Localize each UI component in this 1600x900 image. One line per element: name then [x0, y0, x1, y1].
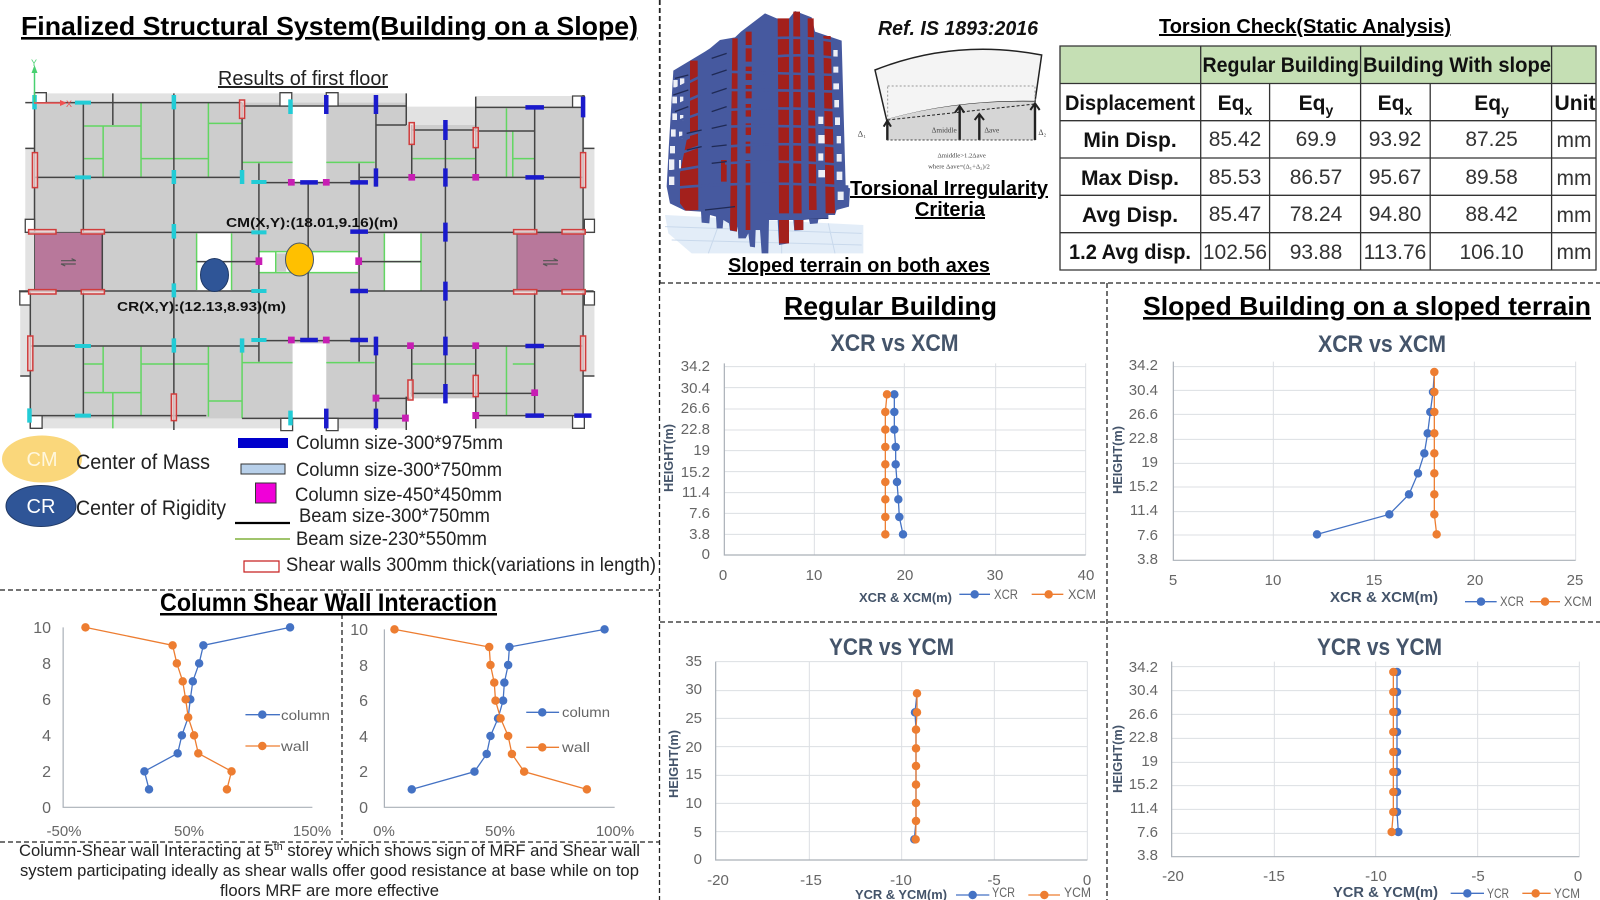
diagram: torsional irregularity: where Δave=(Δ₁+Δ₂)/2 — [928, 164, 990, 171]
legend: center markers: CR — [27, 496, 55, 518]
legend: center markers: Center of Rigidity — [76, 497, 226, 520]
icon: center of rigidity marker — [200, 258, 228, 292]
chart: regular YCR vs YCM: -15 — [800, 872, 822, 889]
table: torsion check: 102.56 — [1203, 241, 1267, 264]
chart: sloped XCR vs XCM: XCR — [1500, 593, 1524, 609]
caption: interaction findings: floors MRF are more effective — [220, 881, 439, 900]
chart: sloped XCR vs XCM: 15 — [1366, 572, 1382, 589]
chart: sloped XCR vs XCM — [1110, 331, 1592, 609]
chart: sloped YCR vs YCM: -20 — [1162, 868, 1184, 885]
chart: sloped XCR vs XCM: 34.2 — [1129, 357, 1158, 374]
chart: sloped YCR vs YCM: 19 — [1141, 753, 1158, 770]
table: torsion check: 93.92 — [1369, 128, 1421, 151]
chart: sloped YCR vs YCM: 26.6 — [1129, 706, 1158, 723]
label: CM coordinates: CM(X,Y):(18.01,9.16)(m) — [226, 215, 398, 230]
chart: regular YCR vs YCM: 0 — [1083, 872, 1091, 889]
chart: regular YCR vs YCM: 15 — [685, 766, 702, 783]
table: torsion check: x — [1245, 102, 1253, 118]
chart: sloped YCR vs YCM: 30.4 — [1129, 682, 1158, 699]
3D building model — [665, 11, 863, 253]
diagram: torsional irregularity: Δ₂ — [1038, 128, 1046, 137]
chart: regular YCR vs YCM: 10 — [685, 795, 702, 812]
chart: sloped XCR vs XCM: 15.2 — [1129, 478, 1158, 495]
table: torsion check: 69.9 — [1296, 128, 1336, 151]
chart: sloped YCR vs YCM: 0 — [1574, 868, 1582, 885]
chart: sloped XCR vs XCM: 20 — [1467, 572, 1483, 589]
heading: regular building: Regular Building — [784, 291, 997, 321]
chart: regular YCR vs YCM: 5 — [694, 824, 702, 841]
legend: center markers: CM — [26, 449, 58, 471]
chart: sloped YCR vs YCM: 7.6 — [1137, 824, 1158, 841]
diagram: torsional irregularity: Δmiddle — [932, 126, 957, 135]
chart: regular XCR vs XCM: 30 — [987, 567, 1003, 584]
chart: sloped YCR vs YCM: HEIGHT(m) — [1110, 725, 1125, 793]
chart: interaction, right: wall — [561, 739, 590, 755]
chart: interaction, left: 6 — [42, 692, 51, 709]
legend: member sizes: Shear walls 300mm thick(variations in length) — [286, 555, 656, 576]
legend: member sizes: Beam size-230*550mm — [296, 529, 487, 550]
chart: regular YCR vs YCM: -20 — [707, 872, 729, 889]
chart: regular XCR vs XCM: 26.6 — [681, 400, 710, 417]
table: torsion check: Min Disp. — [1083, 129, 1177, 152]
label: CR coordinates: CR(X,Y):(12.13,8.93)(m) — [117, 299, 286, 314]
chart: regular XCR vs XCM: 34.2 — [681, 358, 710, 375]
label: torsional irregularity criteria: Torsional Irregularity — [850, 178, 1049, 200]
caption: interaction findings: storey which shows sign of MRF and Shear wall — [283, 841, 640, 860]
chart: sloped YCR vs YCM: 34.2 — [1129, 659, 1158, 676]
chart: interaction, left: wall — [280, 738, 309, 754]
chart: interaction, left: column — [281, 707, 330, 723]
chart: sloped YCR vs YCM: -5 — [1471, 868, 1485, 885]
chart: interaction, right: 0% — [373, 823, 395, 840]
table: torsion check: 85.47 — [1209, 203, 1261, 226]
chart: regular YCR vs YCM: 0 — [694, 851, 702, 868]
chart: regular XCR vs XCM: 40 — [1078, 567, 1094, 584]
chart: sloped XCR vs XCM: 25 — [1567, 572, 1583, 589]
legend: center markers: Center of Mass — [76, 451, 210, 474]
chart: interaction, right: 100% — [596, 823, 634, 840]
chart: sloped YCR vs YCM — [1110, 634, 1582, 900]
chart: sloped YCR vs YCM: -15 — [1263, 868, 1285, 885]
chart: sloped YCR vs YCM: 11.4 — [1130, 800, 1158, 817]
table: torsion check: mm — [1556, 204, 1592, 227]
chart: interaction, right: 8 — [359, 658, 368, 675]
chart: interaction, left: 50% — [174, 823, 204, 840]
chart: regular YCR vs YCM — [666, 634, 1091, 900]
chart: regular YCR vs YCM: 35 — [685, 653, 702, 670]
chart: sloped XCR vs XCM: XCM — [1564, 593, 1592, 609]
caption: interaction findings — [19, 841, 640, 900]
caption: interaction findings: Column-Shear wall Interacting at 5 — [19, 841, 280, 860]
chart: regular XCR vs XCM: 15.2 — [681, 464, 710, 481]
chart: interaction, left: 150% — [293, 823, 331, 840]
label: torsional irregularity criteria — [850, 178, 1049, 221]
legend: member sizes — [235, 433, 656, 576]
legend: member sizes: Column size-300*975mm — [296, 433, 503, 454]
diagram: torsional irregularity — [858, 49, 1046, 171]
chart: regular YCR vs YCM: YCR — [992, 884, 1015, 900]
caption: interaction findings: th — [274, 841, 283, 853]
table: torsion check: 85.53 — [1209, 166, 1261, 189]
table: torsion check: mm — [1556, 129, 1592, 152]
table: torsion check: 95.67 — [1369, 166, 1421, 189]
chart: interaction, right: 50% — [485, 823, 515, 840]
heading: results of first floor: Results of first floor — [218, 68, 388, 90]
chart: interaction, left: -50% — [46, 823, 82, 840]
chart: interaction, left: 10 — [33, 620, 51, 637]
chart: regular XCR vs XCM: 3.8 — [689, 526, 710, 543]
table: torsion check: Building With slope — [1363, 54, 1551, 77]
chart: regular XCR vs XCM: 11.4 — [682, 484, 710, 501]
table: torsion check: 113.76 — [1364, 241, 1426, 264]
chart: interaction, left: 8 — [42, 656, 51, 673]
table: torsion check: 86.57 — [1290, 166, 1342, 189]
chart: interaction, right — [350, 622, 634, 840]
table: torsion check: 94.80 — [1369, 203, 1421, 226]
chart: regular XCR vs XCM: XCR — [994, 586, 1018, 602]
chart: interaction, left: 4 — [42, 728, 51, 745]
chart: interaction, right: 0 — [359, 800, 368, 817]
chart: regular YCR vs YCM: 20 — [685, 739, 702, 756]
diagram: torsional irregularity: Δmiddle>1.2Δave — [937, 152, 986, 159]
table: torsion check: 78.24 — [1290, 203, 1343, 226]
chart: regular XCR vs XCM: 19 — [693, 442, 710, 459]
chart: interaction, left — [33, 620, 331, 840]
table: torsion check: 1.2 Avg disp. — [1069, 241, 1191, 264]
table: torsion check: Max Disp. — [1081, 167, 1179, 190]
heading: sloped building: Sloped Building on a sloped terrain — [1143, 291, 1591, 321]
table: torsion check: Displacement — [1065, 92, 1195, 115]
icon: coordinate axes: X — [66, 99, 72, 109]
chart: regular YCR vs YCM: 25 — [685, 710, 702, 727]
legend: center markers — [2, 436, 226, 526]
chart: interaction, right: 2 — [359, 764, 368, 781]
chart: regular XCR vs XCM: XCR vs XCM — [830, 330, 958, 357]
chart: interaction, right: 4 — [359, 729, 368, 746]
chart: sloped XCR vs XCM: 30.4 — [1129, 382, 1158, 399]
table: torsion check: y — [1326, 102, 1334, 118]
label: code reference: Ref. IS 1893:2016 — [878, 18, 1039, 40]
chart: regular XCR vs XCM: HEIGHT(m) — [661, 424, 676, 492]
table: torsion check: y — [1501, 102, 1509, 118]
chart: interaction, right: column — [562, 704, 610, 720]
chart: regular XCR vs XCM: XCR & XCM(m) — [859, 590, 952, 605]
chart: regular YCR vs YCM: HEIGHT(m) — [666, 730, 681, 798]
icon: center of mass marker — [286, 243, 314, 276]
table: torsion check: Eq — [1299, 92, 1326, 115]
chart: sloped XCR vs XCM: 26.6 — [1129, 406, 1158, 423]
table: torsion check: Eq — [1474, 92, 1501, 115]
label: sloped terrain: Sloped terrain on both axes — [728, 255, 990, 277]
chart: sloped YCR vs YCM: 3.8 — [1137, 847, 1158, 864]
chart: regular XCR vs XCM — [661, 330, 1096, 605]
chart: regular YCR vs YCM: -5 — [987, 872, 1001, 889]
chart: regular YCR vs YCM: YCM — [1064, 884, 1091, 900]
chart: sloped XCR vs XCM: 11.4 — [1130, 502, 1158, 519]
table: torsion check: mm — [1556, 241, 1592, 264]
chart: sloped YCR vs YCM: 22.8 — [1129, 729, 1158, 746]
chart: sloped YCR vs YCM: YCR vs YCM — [1317, 634, 1442, 661]
title: Finalized Structural System(Building on a Slope) — [21, 11, 638, 41]
chart: interaction, right: 10 — [350, 622, 368, 639]
legend: member sizes: Column size-450*450mm — [295, 485, 502, 506]
chart: sloped XCR vs XCM: 5 — [1169, 572, 1177, 589]
legend: member sizes: Column size-300*750mm — [296, 460, 502, 481]
table: torsion check: 89.58 — [1465, 166, 1518, 189]
chart: regular XCR vs XCM: 30.4 — [681, 380, 710, 397]
icon: coordinate axes — [31, 58, 72, 109]
table: torsion check: mm — [1556, 167, 1592, 190]
heading: column shear wall interaction: Column Shear Wall Interaction — [160, 589, 497, 617]
chart: regular XCR vs XCM: 0 — [702, 546, 710, 563]
chart: sloped XCR vs XCM: XCR & XCM(m) — [1330, 589, 1438, 606]
chart: regular XCR vs XCM: 20 — [897, 567, 913, 584]
chart: sloped YCR vs YCM: -10 — [1365, 868, 1387, 885]
chart: sloped XCR vs XCM: XCR vs XCM — [1318, 331, 1446, 358]
table: torsion check: 93.88 — [1290, 241, 1342, 264]
chart: interaction, right: 6 — [359, 693, 368, 710]
chart: regular YCR vs YCM: YCR vs YCM — [829, 634, 954, 661]
chart: sloped YCR vs YCM: 15.2 — [1129, 776, 1158, 793]
chart: regular XCR vs XCM: 10 — [806, 567, 822, 584]
table: torsion check: 88.42 — [1465, 203, 1518, 226]
caption: interaction findings: system participating ideally as shear walls offer good resistance at base while on top — [20, 861, 639, 880]
chart: interaction, left: 0 — [42, 800, 51, 817]
floor plan — [19, 93, 594, 431]
table: torsion check: Eq — [1218, 92, 1245, 115]
diagram: torsional irregularity: Δave — [984, 126, 999, 135]
heading: torsion check: Torsion Check(Static Analysis) — [1159, 16, 1451, 38]
table: torsion check: 85.42 — [1209, 128, 1261, 151]
table: torsion check: Unit — [1554, 92, 1596, 115]
chart: sloped XCR vs XCM: 3.8 — [1137, 551, 1158, 568]
chart: regular XCR vs XCM: 22.8 — [681, 421, 710, 438]
chart: interaction, left: 2 — [42, 764, 51, 781]
label: torsional irregularity criteria: Criteria — [915, 199, 986, 221]
table: torsion check — [1060, 46, 1596, 270]
table: torsion check: Regular Building — [1202, 54, 1359, 77]
table: torsion check: 87.25 — [1465, 128, 1518, 151]
chart: regular YCR vs YCM: 30 — [685, 681, 702, 698]
table: torsion check: Eq — [1378, 92, 1405, 115]
chart: regular XCR vs XCM: XCM — [1068, 586, 1096, 602]
chart: regular XCR vs XCM: 0 — [719, 567, 727, 584]
diagram: torsional irregularity: Δ₁ — [858, 129, 866, 139]
table: torsion check: x — [1405, 102, 1413, 118]
chart: regular XCR vs XCM: 7.6 — [689, 505, 710, 522]
chart: sloped XCR vs XCM: 10 — [1265, 572, 1281, 589]
table: torsion check: 106.10 — [1459, 241, 1524, 264]
chart: regular YCR vs YCM: -10 — [890, 872, 912, 889]
chart: sloped XCR vs XCM: HEIGHT(m) — [1110, 426, 1125, 494]
chart: sloped XCR vs XCM: 7.6 — [1137, 527, 1158, 544]
chart: sloped XCR vs XCM: 22.8 — [1129, 430, 1158, 447]
table: torsion check: Avg Disp. — [1082, 204, 1178, 227]
icon: coordinate axes: Y — [31, 58, 37, 68]
legend: member sizes: Beam size-300*750mm — [299, 506, 490, 527]
chart: sloped XCR vs XCM: 19 — [1141, 454, 1158, 471]
